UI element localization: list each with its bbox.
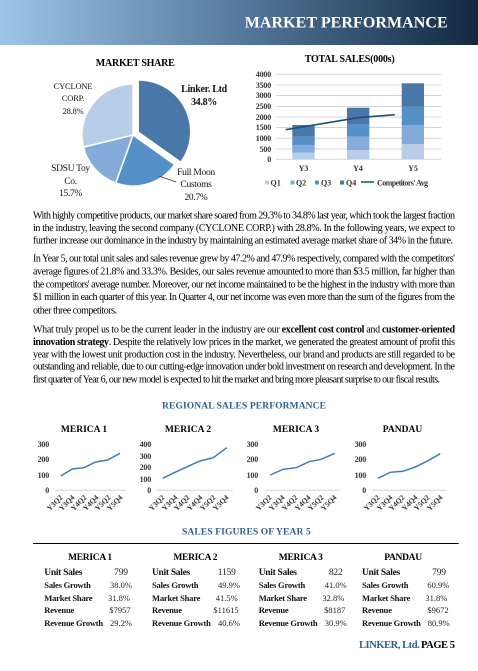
line chart: Merica 3: Y5Q2 <box>306 493 326 513</box>
line chart: Merica 2: 200 <box>140 463 151 472</box>
table: Merica 3 <box>259 553 347 628</box>
line chart: Merica 3: 300 <box>247 440 258 449</box>
line chart: Merica 3 <box>247 425 341 513</box>
line chart: Merica 3: Y5Q4 <box>319 493 339 513</box>
y axis labels: 1000 <box>256 134 271 143</box>
line chart: Merica 1: Y4Q4 <box>81 493 101 513</box>
line chart: Merica 1: Y4Q2 <box>69 493 89 513</box>
body text paragraph 2: the competitors' average number. Moreover, our net income maintained to be the highest in the industry with more than <box>33 279 455 290</box>
table: Merica 2: $11615 <box>213 605 239 615</box>
line chart: Pandau: 100 <box>355 471 366 480</box>
body text paragraph 3 <box>33 325 456 385</box>
line chart: Pandau: Y5Q2 <box>412 493 432 513</box>
bars Y3 <box>292 125 315 159</box>
table: Merica 1: Market Share <box>44 593 93 603</box>
y axis labels <box>256 70 271 164</box>
footer: LINKER, Ltd. <box>359 640 420 651</box>
x axis labels: Y5 <box>408 164 418 173</box>
label: SDSU: SDSU Toy <box>51 164 90 174</box>
bars Y4 <box>347 108 369 159</box>
label: Linker: Linker. Ltd <box>181 84 228 95</box>
line chart: Merica 3: 100 <box>247 471 258 480</box>
x axis labels <box>299 164 418 173</box>
table: Pandau: PANDAU <box>384 553 422 563</box>
label: Full Moon: 20.7% <box>184 193 208 203</box>
line chart: Merica 1: 0 <box>45 486 49 495</box>
table: Pandau: Market Share <box>362 593 411 603</box>
table: Merica 2: 1159 <box>218 568 236 578</box>
line chart: Merica 2: 100 <box>140 475 151 484</box>
table: Pandau <box>362 553 450 628</box>
sales figures heading: SALES FIGURES OF YEAR 5 <box>182 528 311 538</box>
body text paragraph 2: $1 million in each quarter of this year. In Quarter 4, our net income was even more than the sum of the figures from the <box>33 292 456 303</box>
line chart: Merica 2: 300 <box>140 452 151 461</box>
line chart: Merica 2: Y3Q4 <box>160 493 180 513</box>
line chart: Merica 1: 300 <box>38 440 49 449</box>
legend: Q1 <box>270 178 281 188</box>
table: Merica 3: $8187 <box>324 605 345 615</box>
body text paragraph 3: innovation strategy. Despite the relatively low prices in the market, we generated the greatest amount of profit this <box>33 337 455 348</box>
legend: Competitors' Avg <box>377 178 428 188</box>
table: Merica 1 <box>44 553 132 628</box>
table: Merica 1: MERICA 1 <box>68 553 112 563</box>
table: Merica 1: Unit Sales <box>44 568 83 578</box>
table: Merica 2: Market Share <box>152 593 201 603</box>
y axis labels: 3500 <box>256 81 271 90</box>
table: Pandau: Revenue Growth <box>362 618 421 628</box>
line chart: Pandau: Y3Q2 <box>362 493 382 513</box>
line chart: Merica 1: 200 <box>38 455 49 464</box>
body text paragraph 3: outstanding and reliable, due to our cutting-edge innovation under bold investment on research and development. In the <box>33 361 456 372</box>
table: Merica 2: 49.9% <box>218 580 240 590</box>
line chart: Merica 2: Y4Q4 <box>185 493 205 513</box>
table: Pandau: $9672 <box>427 605 449 615</box>
legend: Q4 <box>346 178 356 188</box>
line chart: Merica 1: Y5Q4 <box>105 493 125 513</box>
legend: Q3 <box>321 178 331 188</box>
x axis labels: Y3 <box>299 164 308 173</box>
table: Merica 3: 30.9% <box>325 618 347 628</box>
table: Merica 3: Revenue Growth <box>259 618 318 628</box>
table: Merica 2: Revenue Growth <box>152 618 211 628</box>
line chart: Merica 1: MERICA 1 <box>61 425 107 435</box>
label: Cyclone: CORP. <box>62 93 84 103</box>
label: Full Moon <box>159 168 215 203</box>
table: Merica 2: 41.5% <box>216 593 238 603</box>
body text paragraph 3: year with the lowest unit production cost in the industry. Nevertheless, our brand and products are still regarded to be <box>33 349 456 360</box>
line chart: Pandau: Y4Q2 <box>387 493 407 513</box>
line chart: Pandau: Y3Q4 <box>375 493 395 513</box>
body text paragraph 3: first quarter of Year 6, our new model is expected to hit the market and bring more pleasant surprise to our fiscal results. <box>33 374 440 385</box>
line chart: Merica 1: Y3Q4 <box>57 493 77 513</box>
header banner <box>0 0 478 45</box>
line chart: Merica 3: 0 <box>254 486 258 495</box>
line chart: Pandau: 200 <box>355 455 366 464</box>
line chart: Merica 1: Y5Q2 <box>93 493 113 513</box>
line chart: Pandau: Y5Q4 <box>425 493 445 513</box>
market share heading: MARKET SHARE <box>96 58 175 69</box>
line chart: Merica 1: Y3Q2 <box>45 493 65 513</box>
table: Merica 1: Revenue <box>44 605 74 615</box>
body text paragraph 1 <box>33 210 455 246</box>
table: Merica 1: Sales Growth <box>44 580 91 590</box>
table: Merica 1: 799 <box>114 568 128 578</box>
table: Merica 2: MERICA 2 <box>173 553 218 563</box>
table: Merica 3: 822 <box>329 568 343 578</box>
table: Merica 2: 40.6% <box>218 618 240 628</box>
line chart: Merica 1 <box>38 425 126 513</box>
footer: PAGE 5 <box>421 640 455 651</box>
table: Pandau: 799 <box>432 568 446 578</box>
y axis labels: 500 <box>260 145 271 154</box>
line chart: Merica 3: Y4Q2 <box>280 493 300 513</box>
competitors average line <box>286 115 395 130</box>
line chart: Merica 3: 200 <box>247 455 258 464</box>
footer <box>359 640 455 651</box>
line chart: Merica 2: Y5Q2 <box>198 493 218 513</box>
label: Cyclone: 28.8% <box>63 106 84 116</box>
line chart: Merica 3: MERICA 3 <box>273 425 319 435</box>
table: Merica 3: Revenue <box>259 605 289 615</box>
table: Pandau: Sales Growth <box>362 580 409 590</box>
line chart: Pandau: 0 <box>362 486 366 495</box>
table: Merica 2: Sales Growth <box>152 580 199 590</box>
body text paragraph 2: In Year 5, our total unit sales and sales revenue grew by 47.2% and 47.9% respectively, compared with the competitors' <box>33 254 455 265</box>
label: Full Moon: Full Moon <box>177 168 215 178</box>
label: Full Moon: Customs <box>180 180 212 190</box>
table: Merica 1: 29.2% <box>110 618 132 628</box>
table: Pandau: 80.9% <box>428 618 450 628</box>
line chart: Pandau: 300 <box>355 440 366 449</box>
panel: market share pie chart <box>51 58 228 203</box>
y axis labels: 2500 <box>256 102 271 111</box>
y axis labels: 3000 <box>256 91 271 100</box>
table: Merica 1: 31.8% <box>108 593 130 603</box>
line chart: Pandau: Y4Q4 <box>400 493 420 513</box>
table: Merica 1: $7957 <box>109 605 131 615</box>
page title: MARKET PERFORMANCE <box>245 15 448 32</box>
body text paragraph 1: further increase our dominance in the industry by maintaining an estimated average market share of 34% in the future. <box>33 235 453 246</box>
table: Pandau: 31.8% <box>425 593 447 603</box>
line chart: Pandau: PANDAU <box>383 425 422 435</box>
x axis labels: Y4 <box>353 164 363 173</box>
table: Merica 2 <box>152 553 240 628</box>
table: Merica 1: 38.0% <box>110 580 132 590</box>
legend <box>265 178 428 188</box>
table: Merica 3: 32.8% <box>322 593 344 603</box>
y axis labels: 2000 <box>256 113 271 122</box>
body text paragraph 3: What truly propel us to be the current leader in the industry are our excellent cost control and customer-oriented <box>33 325 455 336</box>
y axis labels: 0 <box>267 155 271 164</box>
body text paragraph 2: average figures of 21.8% and 33.3%. Besides, our sales revenue amounted to more than $3.5 million, far higher than <box>33 266 455 277</box>
body text paragraph 2 <box>33 254 456 316</box>
table: Pandau: Revenue <box>362 605 392 615</box>
y axis labels: 4000 <box>256 70 271 79</box>
regional sales heading: REGIONAL SALES PERFORMANCE <box>162 402 326 412</box>
bars Y5 <box>402 83 424 159</box>
line chart: Merica 2: Y3Q2 <box>147 493 167 513</box>
line chart: Merica 3: Y4Q4 <box>293 493 313 513</box>
line chart: Merica 2: 0 <box>147 486 151 495</box>
table: Merica 3: Market Share <box>259 593 307 603</box>
line chart: Merica 1: 100 <box>38 471 49 480</box>
body text paragraph 2: other three competitors. <box>33 305 117 316</box>
table: Merica 3: 41.0% <box>325 580 347 590</box>
line chart: Merica 2: Y5Q4 <box>211 493 231 513</box>
legend: Q2 <box>296 178 306 188</box>
label: SDSU: Co. <box>64 177 77 187</box>
label: Linker: 34.8% <box>191 97 217 108</box>
table: Pandau: 60.9% <box>427 580 449 590</box>
label: Cyclone: CYCLONE <box>54 81 92 91</box>
line chart: Merica 3: Y3Q2 <box>254 493 274 513</box>
table: Merica 1: Revenue Growth <box>44 618 103 628</box>
line chart: Merica 2: Y4Q2 <box>172 493 192 513</box>
pie slices <box>82 81 190 186</box>
y axis labels: 1500 <box>256 123 271 132</box>
table: Merica 3: MERICA 3 <box>279 553 323 563</box>
table: Merica 3: Sales Growth <box>259 580 305 590</box>
line chart: Merica 2 <box>140 425 233 513</box>
table: Merica 3: Unit Sales <box>259 568 297 578</box>
line chart: Merica 3: Y3Q4 <box>267 493 287 513</box>
table: Pandau: Unit Sales <box>362 568 401 578</box>
line chart: Pandau <box>355 425 447 513</box>
table: Merica 2: Unit Sales <box>152 568 191 578</box>
body text paragraph 1: With highly competitive products, our market share soared from 29.3% to 34.8% last year, which took the largest fraction <box>33 210 455 221</box>
total sales heading: TOTAL SALES(000s) <box>305 54 395 65</box>
body text paragraph 1: in the industry, leaving the second company (CYCLONE CORP.) with 28.8%. In the following years, we expect to <box>33 223 455 234</box>
panel: total sales bar chart <box>256 54 441 188</box>
line chart: Merica 2: MERICA 2 <box>165 425 211 435</box>
label: SDSU: 15.7% <box>59 189 82 199</box>
line chart: Merica 2: 400 <box>140 440 151 449</box>
table: Merica 2: Revenue <box>152 605 182 615</box>
